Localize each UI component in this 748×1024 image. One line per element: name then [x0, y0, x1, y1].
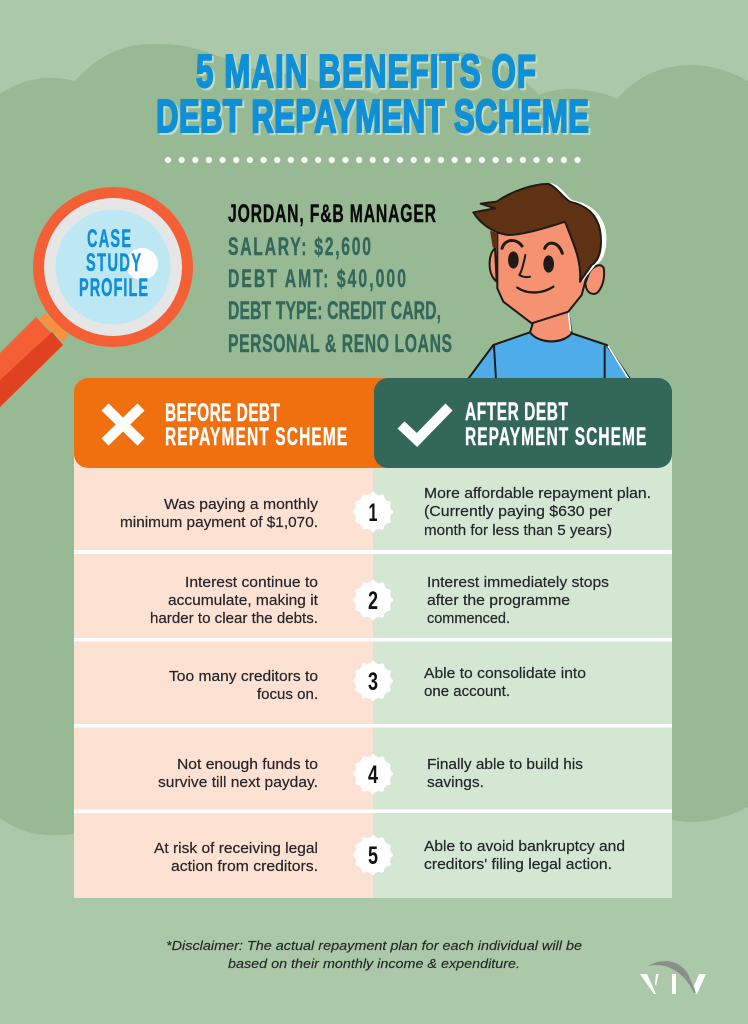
title: 5 MAIN BENEFITS OF — [196, 46, 536, 98]
badge 4 — [355, 756, 391, 792]
profile text: PERSONAL & RENO LOANS — [228, 330, 452, 358]
row 2: commenced. — [427, 611, 510, 627]
row 4: savings. — [427, 775, 484, 791]
badge 5 — [355, 837, 391, 873]
icon: magnifying glass — [0, 187, 193, 407]
title: 5 MAIN BENEFITS OF — [198, 48, 538, 100]
background hills — [0, 44, 748, 835]
row 5: action from creditors. — [171, 859, 318, 875]
row 5: Able to avoid bankruptcy and — [424, 839, 625, 855]
row 1: More affordable repayment plan. — [424, 486, 651, 502]
badge 2 — [355, 582, 391, 618]
magnifier label: CASE — [87, 226, 131, 253]
row 2 — [150, 575, 609, 627]
badge 1 — [355, 494, 391, 530]
row 2: accumulate, making it — [168, 593, 318, 609]
badge 4: 4 — [368, 761, 378, 789]
row 1: Was paying a monthly — [164, 497, 319, 513]
profile text: SALARY: $2,600 — [228, 233, 371, 261]
row 1: (Currently paying $630 per — [424, 504, 612, 520]
profile text — [228, 200, 452, 358]
header: before — [74, 378, 404, 468]
row 3 — [169, 663, 586, 703]
comparison table — [74, 378, 672, 898]
row 1 — [120, 486, 651, 539]
row 3: focus on. — [257, 687, 318, 703]
header: after — [374, 378, 672, 468]
logo: VIV — [640, 961, 706, 994]
icon: cross — [105, 407, 141, 442]
disclaimer: *Disclaimer: The actual repayment plan for each individual will be — [166, 938, 582, 953]
illustration: Jordan character — [467, 183, 631, 380]
row 1: month for less than 5 years) — [424, 523, 612, 539]
title — [156, 46, 591, 145]
row 5 — [154, 837, 625, 875]
badge 2: 2 — [368, 587, 378, 615]
row 2: Interest continue to — [185, 575, 318, 591]
header: before: BEFORE DEBT — [165, 399, 280, 427]
row 1: minimum payment of $1,070. — [120, 515, 318, 531]
row 3: Able to consolidate into — [424, 666, 586, 682]
row 2: harder to clear the debts. — [150, 611, 318, 627]
badge 1: 1 — [368, 499, 378, 527]
badge 3 — [355, 663, 391, 699]
row 2: after the programme — [427, 593, 570, 609]
disclaimer — [166, 938, 582, 971]
header: after: REPAYMENT SCHEME — [465, 423, 646, 451]
row 3: Too many creditors to — [169, 669, 318, 685]
row 4: survive till next payday. — [158, 775, 318, 791]
title: DEBT REPAYMENT SCHEME — [158, 93, 591, 145]
title: DEBT REPAYMENT SCHEME — [156, 91, 589, 143]
magnifier label: PROFILE — [79, 275, 148, 302]
magnifier label: STUDY — [86, 250, 141, 277]
profile text: JORDAN, F&B MANAGER — [228, 200, 436, 228]
profile text: DEBT TYPE: CREDIT CARD, — [228, 297, 441, 325]
row 4: Not enough funds to — [177, 757, 318, 773]
badge 3: 3 — [368, 668, 378, 696]
magnifier label — [79, 226, 148, 302]
row 5: creditors' filing legal action. — [424, 857, 612, 873]
dotted divider — [168, 157, 580, 163]
table rows background — [74, 455, 672, 898]
row 2: Interest immediately stops — [427, 575, 609, 591]
icon: check — [401, 407, 449, 440]
row 5: At risk of receiving legal — [154, 841, 318, 857]
row 4 — [158, 756, 583, 792]
header: before: REPAYMENT SCHEME — [165, 423, 347, 451]
badge 5: 5 — [368, 842, 378, 870]
disclaimer: based on their monthly income & expenditure. — [228, 956, 520, 971]
row 3: one account. — [424, 684, 510, 700]
profile text: DEBT AMT: $40,000 — [228, 265, 406, 293]
header: after: AFTER DEBT — [465, 398, 568, 426]
row 4: Finally able to build his — [427, 757, 583, 773]
